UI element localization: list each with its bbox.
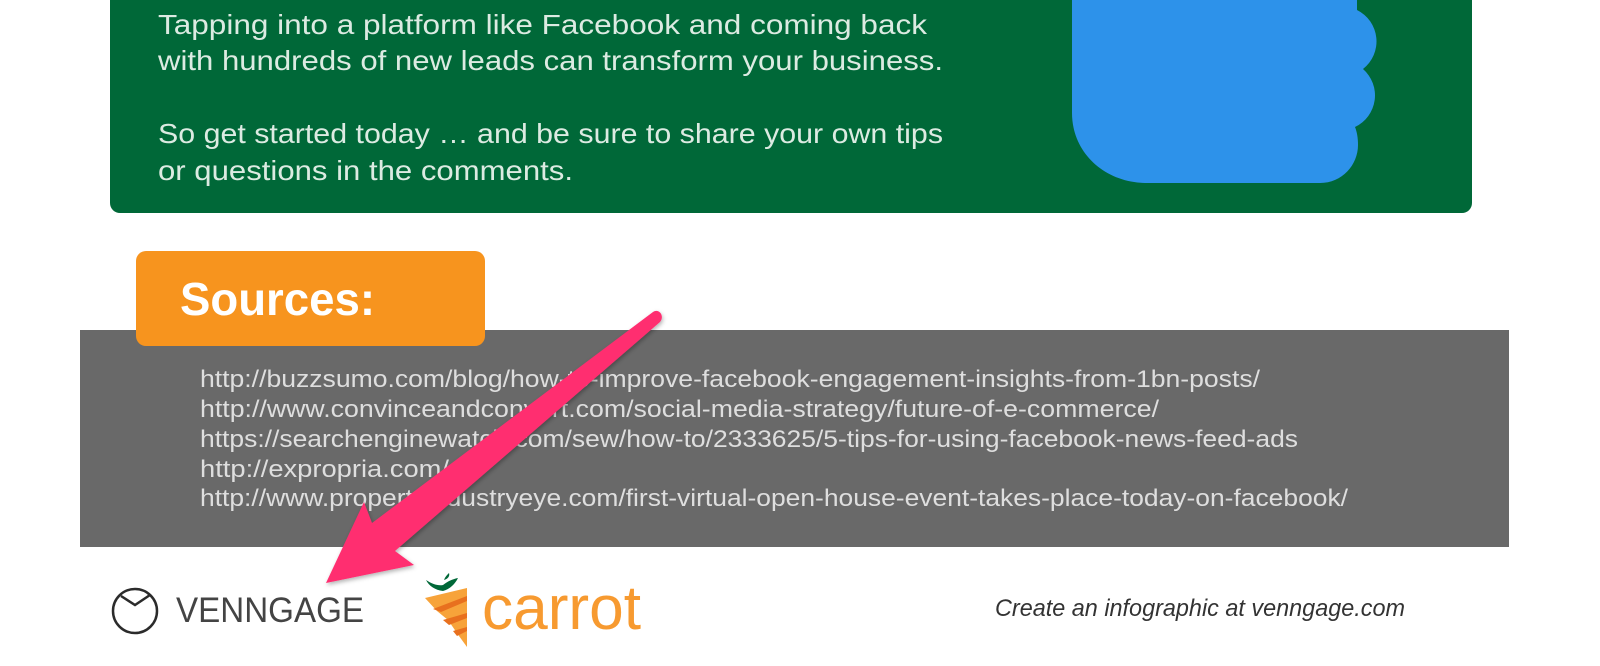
footer: create an infographic: Create an infographic at venngage.com bbox=[995, 595, 1405, 622]
source links: https://searchenginewatch.com/sew/how-to/2333625/5-tips-for-using-facebook-news-feed-ads bbox=[200, 426, 1298, 453]
heading: Sources: Sources: bbox=[180, 273, 375, 325]
panel: grey sources bbox=[80, 330, 1509, 547]
closing message text: Tapping into a platform like Facebook and coming back bbox=[158, 9, 928, 40]
icon: Venngage circle bbox=[113, 589, 157, 633]
heading: Sources bbox=[136, 251, 485, 346]
icon: carrot bbox=[425, 573, 467, 647]
logo: Venngage bbox=[113, 589, 364, 633]
closing message text: So get started today … and be sure to share your own tips bbox=[158, 118, 943, 149]
logo: Carrot bbox=[425, 573, 641, 647]
closing message text: with hundreds of new leads can transform your business. bbox=[157, 45, 943, 76]
source links: http://buzzsumo.com/blog/how-to-improve-facebook-engagement-insights-from-1bn-posts/ bbox=[200, 366, 1260, 393]
source links bbox=[200, 366, 1348, 512]
logo: Carrot: carrot bbox=[482, 574, 641, 643]
panel: green closing message bbox=[110, 0, 1472, 213]
closing message text: or questions in the comments. bbox=[158, 155, 573, 186]
source links: http://expropria.com/ bbox=[200, 456, 449, 483]
logo: Venngage: VENNGAGE bbox=[176, 591, 364, 630]
source links: http://www.propertyindustryeye.com/first-virtual-open-house-event-takes-place-today-on-facebook/ bbox=[200, 485, 1348, 512]
closing message text bbox=[157, 9, 943, 186]
arrow: pink pointing to logo bbox=[326, 311, 662, 583]
source links: http://www.convinceandconvert.com/social-media-strategy/future-of-e-commerce/ bbox=[200, 396, 1159, 423]
icon: blue thumbs-up fist bbox=[1072, 0, 1377, 183]
